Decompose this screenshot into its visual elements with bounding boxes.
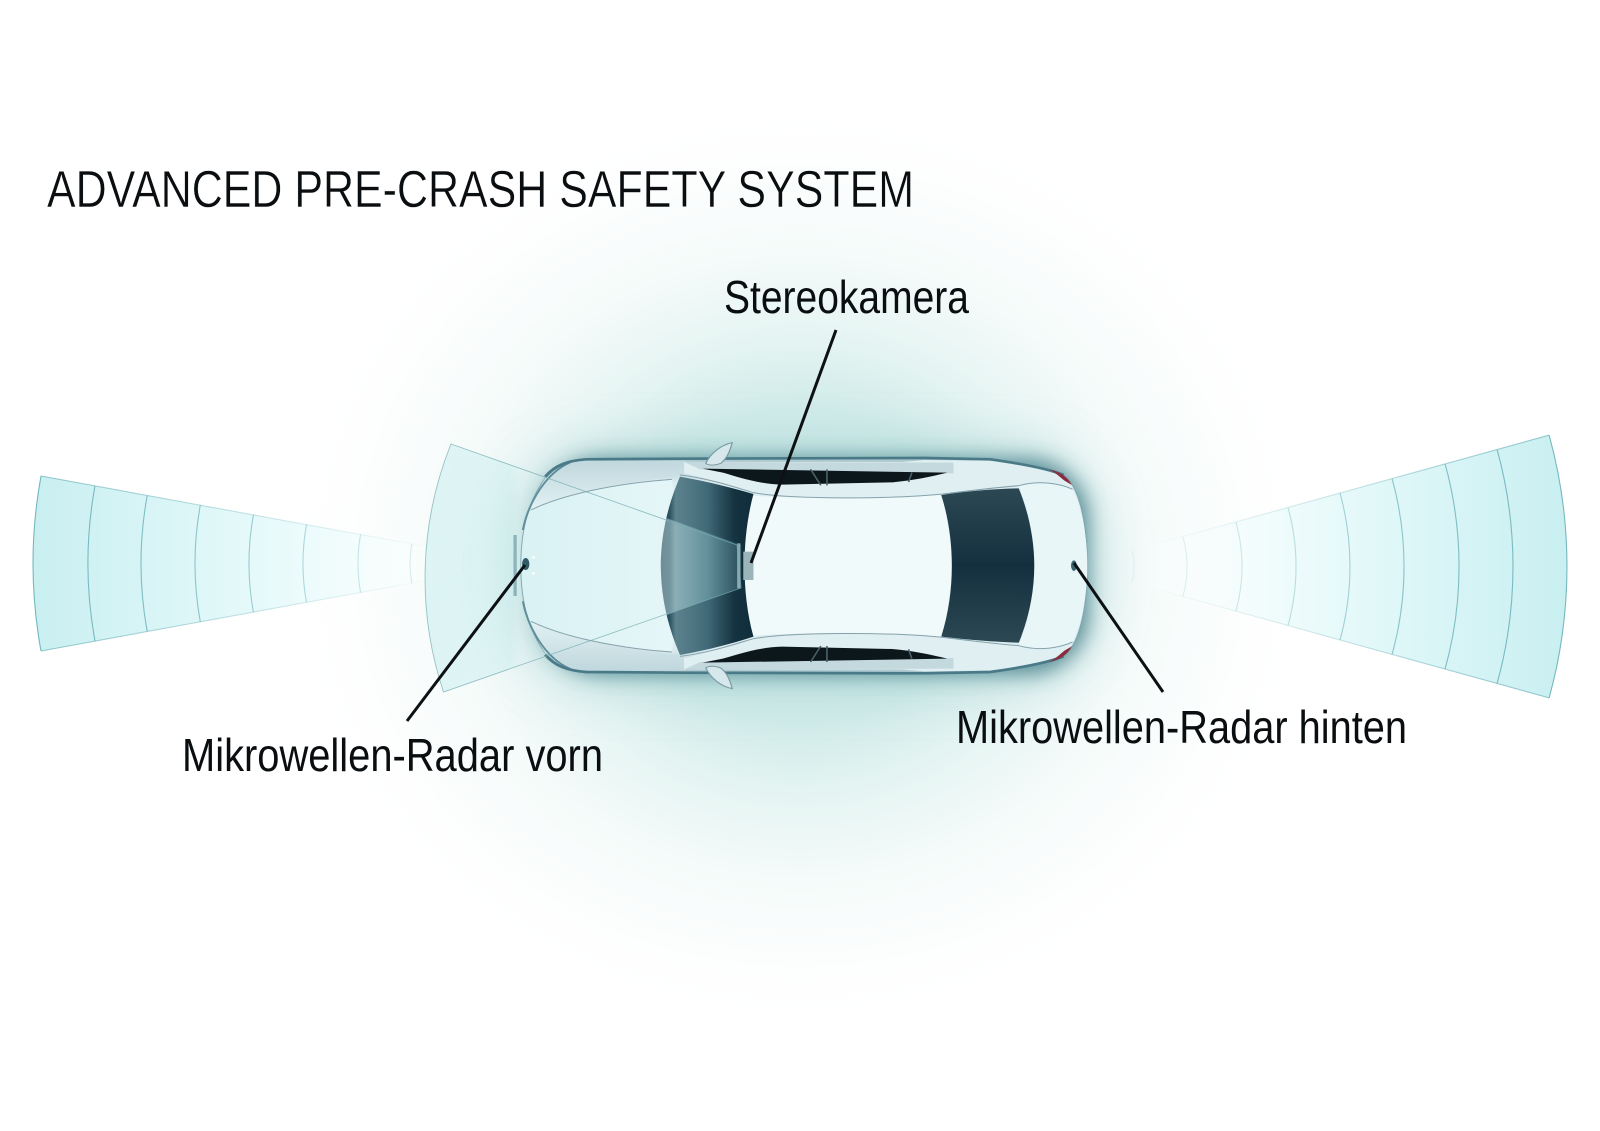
roof (745, 494, 953, 637)
front long-range radar beam (33, 476, 519, 651)
lower side details (mirrored) (523, 601, 1073, 689)
near-range camera field of view (425, 444, 741, 692)
side window (702, 469, 947, 485)
mirror (706, 443, 732, 465)
title: ADVANCED PRE-CRASH SAFETY SYSTEM (47, 161, 914, 219)
car, top view (513, 443, 1087, 689)
label: Mikrowellen-Radar vorn: Mikrowellen-Radar vorn (182, 729, 603, 781)
leader line: Radar hinten (1074, 563, 1163, 692)
label: Stereokamera: Stereokamera (724, 271, 969, 323)
background teal glow around car (300, 116, 1300, 1016)
car body (521, 458, 1087, 674)
front corner trim (523, 463, 570, 530)
upper side details (523, 443, 1073, 530)
leader line: Stereokamera (751, 330, 836, 563)
windshield (661, 477, 753, 655)
label: Mikrowellen-Radar hinten: Mikrowellen-Radar hinten (956, 701, 1407, 753)
stereo camera unit (737, 543, 753, 588)
hood (522, 479, 684, 652)
front fender (531, 460, 702, 510)
trunk lid (1019, 483, 1087, 649)
window pillar (811, 469, 912, 485)
rear radar sensor (1071, 560, 1077, 571)
tail light (1049, 469, 1072, 485)
window top trim (684, 462, 953, 473)
camera view cone on windshield (661, 517, 741, 617)
leader line: Radar vorn (407, 565, 525, 721)
body edge highlight (545, 458, 1064, 477)
roof rail (684, 462, 909, 497)
A-line contour (531, 475, 1073, 510)
front radar sensor (522, 556, 535, 575)
front grille bar (513, 535, 517, 596)
rear fender (888, 460, 1070, 497)
rear radar beam (1075, 435, 1567, 698)
rear window (941, 488, 1034, 643)
